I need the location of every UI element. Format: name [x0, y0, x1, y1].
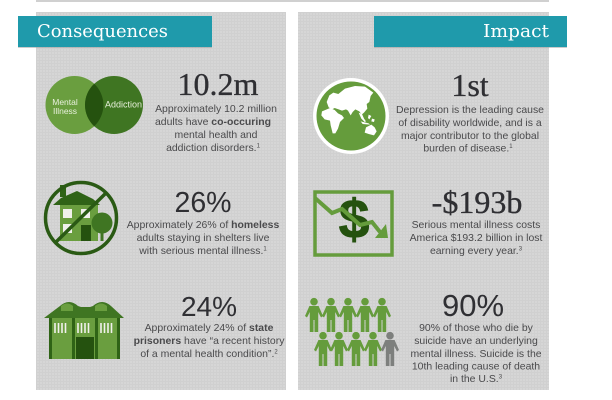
- panel: consequences: [18, 12, 286, 390]
- panel background: impact: [298, 12, 549, 390]
- text: lost earnings: Serious mental illness costs: [412, 220, 540, 231]
- text: state prisoners: 2: [274, 350, 278, 356]
- icon: globe: [313, 78, 389, 154]
- text: homeless adults: Approximately 26% of homeless: [127, 220, 279, 231]
- stat: 24%: 24%: [181, 291, 237, 322]
- text: co-occurring disorders: adults have co-occuring: [155, 117, 271, 128]
- text: depression: burden of disease.: [423, 144, 509, 154]
- text: depression: Depression is the leading cause: [396, 105, 544, 116]
- text: suicide: in the U.S.: [450, 374, 499, 385]
- text: state prisoners: Approximately 24% of state: [145, 323, 274, 334]
- panel: impact: [298, 12, 567, 390]
- text: state prisoners: prisoners have “a recent history: [134, 336, 285, 347]
- text: co-occurring disorders: addiction disorders.: [166, 143, 257, 154]
- icon: falling dollar chart: [315, 188, 392, 255]
- text: depression: major contributor to the global: [401, 131, 539, 142]
- text: suicide: 90% of those who die by: [419, 323, 534, 334]
- icon: venn diagram: [46, 76, 143, 134]
- icon: no home: [46, 182, 116, 254]
- text: state prisoners: [134, 323, 285, 360]
- stat: 10.2m: 10.2m: [178, 66, 259, 102]
- icon: prison: [44, 302, 124, 359]
- stat: 90%: 90%: [442, 288, 504, 323]
- text: homeless adults: [127, 220, 279, 257]
- banner: impact: [374, 16, 567, 48]
- text: co-occurring disorders: mental health and: [175, 130, 258, 141]
- text: co-occurring disorders: [155, 104, 277, 154]
- stat: 26%: 26%: [174, 187, 232, 219]
- text: co-occurring disorders: 1: [257, 144, 261, 150]
- banner: impact: Impact: [483, 21, 550, 42]
- text: suicide: 10th leading cause of death: [412, 362, 540, 372]
- text: suicide: 3: [499, 374, 503, 380]
- stat: 1st: 1st: [451, 67, 489, 103]
- icon: ten people: [305, 298, 399, 366]
- icon: venn diagram: Illness: [53, 106, 77, 116]
- banner: consequences: Consequences: [37, 21, 168, 42]
- text: homeless adults: 1: [263, 246, 267, 252]
- text: state prisoners: of a mental health condition”.: [140, 349, 274, 360]
- text: depression: [396, 105, 544, 154]
- text: depression: of disability worldwide, and is a: [398, 118, 542, 129]
- icon: falling dollar chart: $: [339, 188, 369, 250]
- stat: -$193b: -$193b: [432, 184, 522, 220]
- text: homeless adults: adults staying in shelters live: [137, 233, 270, 244]
- banner: consequences: [18, 16, 212, 48]
- text: lost earnings: [410, 220, 543, 257]
- text: suicide: suicide have an underlying: [414, 336, 538, 347]
- text: suicide: mental illness. Suicide is the: [410, 349, 542, 360]
- icon: venn diagram: Mental: [52, 97, 78, 107]
- text: suicide: [410, 323, 542, 385]
- text: depression: 1: [509, 144, 513, 150]
- text: lost earnings: America $193.2 billion in lost: [410, 233, 543, 244]
- panel background: consequences: [36, 12, 286, 390]
- text: lost earnings: earning every year.: [430, 246, 519, 257]
- text: homeless adults: with serious mental illness.: [139, 246, 263, 257]
- text: lost earnings: 3: [519, 246, 523, 252]
- icon: venn diagram: Addiction: [105, 100, 142, 110]
- text: co-occurring disorders: Approximately 10.2 million: [155, 104, 277, 115]
